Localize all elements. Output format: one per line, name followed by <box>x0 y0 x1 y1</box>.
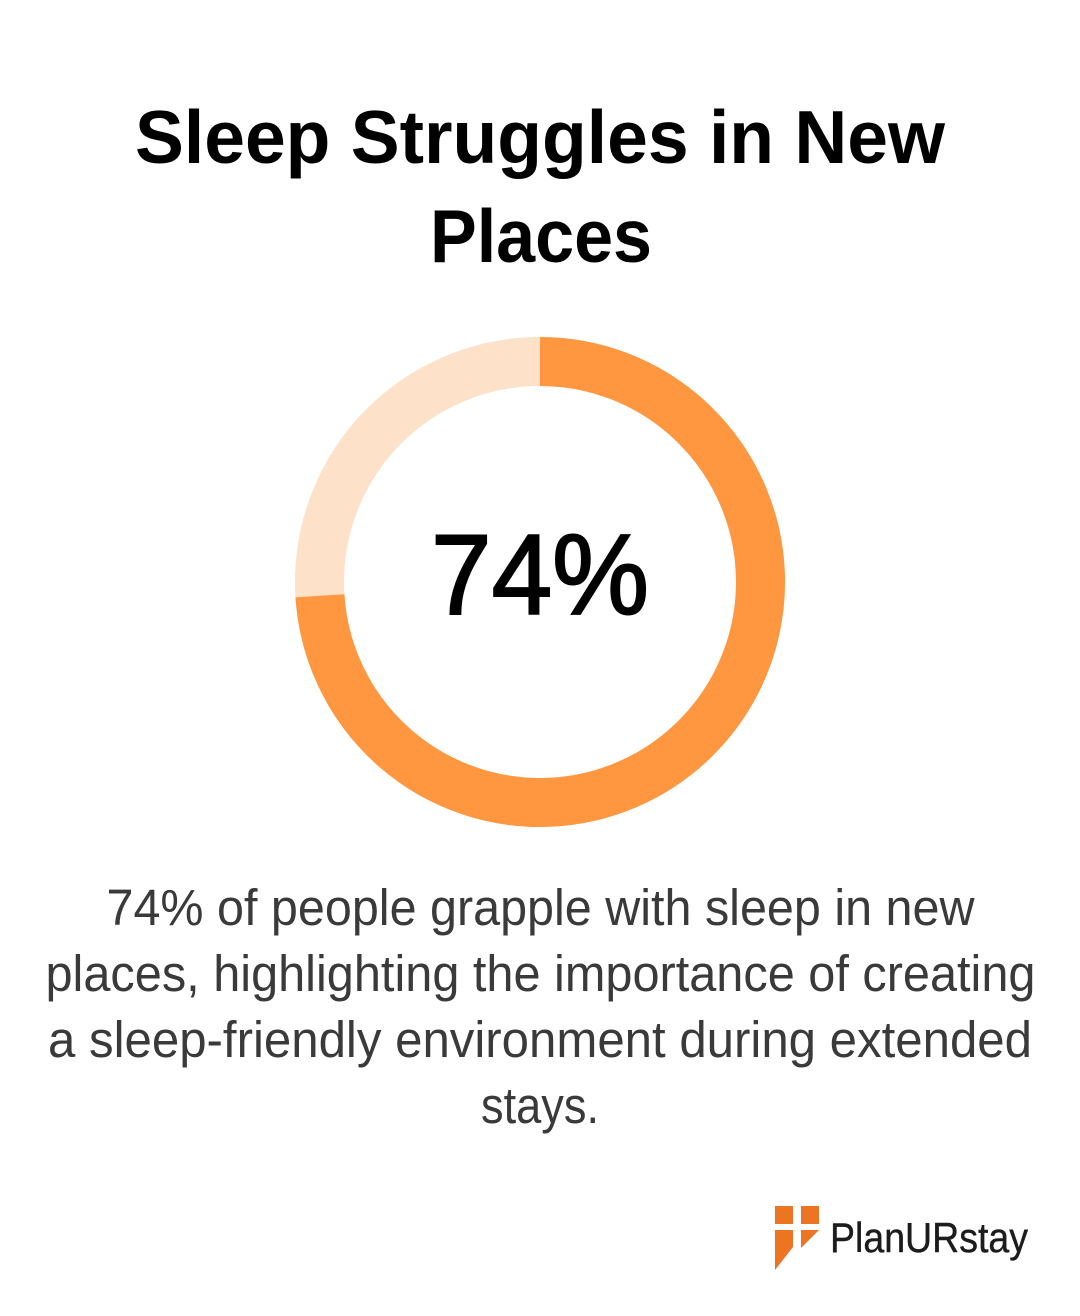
description text <box>46 879 1036 1134</box>
logo: PlanURstay <box>775 1206 1028 1270</box>
description text: 74% of people grapple with sleep in new <box>106 879 975 936</box>
donut chart: 74% <box>320 362 761 803</box>
description text: places, highlighting the importance of creating <box>46 945 1036 1002</box>
logo wordmark: PlanURstay <box>830 1214 1028 1261</box>
title: Places <box>430 194 652 278</box>
title <box>135 95 946 278</box>
description text: a sleep-friendly environment during extended <box>48 1011 1032 1068</box>
icon: logo mark <box>775 1206 819 1270</box>
description text: stays. <box>481 1077 599 1134</box>
donut value: 74% <box>431 512 649 639</box>
title: Sleep Struggles in New <box>135 95 946 179</box>
